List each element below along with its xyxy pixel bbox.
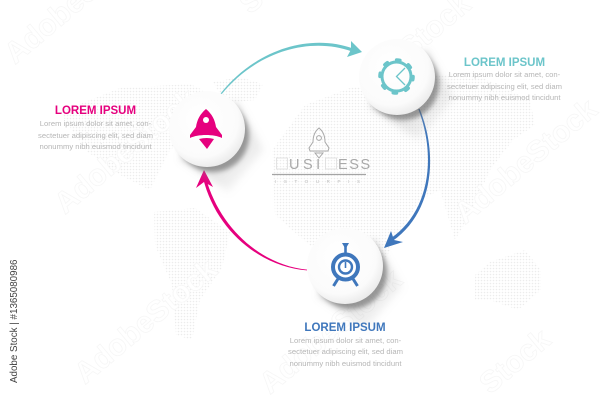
icon: outline rocket [309,128,329,158]
body: bottom: sectetuer adipiscing elit, sed diam [288,347,403,356]
body: bottom [288,336,403,368]
node: rocket [169,91,264,192]
world map [60,72,541,340]
tagline: ISTOURPIS [275,179,368,184]
watermark: AdobeStock [68,252,224,390]
placeholder boxes in wordmark [276,158,336,169]
body: left: sectetuer adipiscing elit, sed diam [38,131,153,140]
heading: left: LOREM IPSUM [55,105,136,117]
icon: target [333,243,358,286]
watermark: AdobeStock [448,92,600,230]
rule [272,174,366,176]
heading: bottom: LOREM IPSUM [304,322,386,334]
watermark: AdobeStock [48,82,204,220]
business wordmark: USI [289,157,324,173]
body: bottom: nonummy nibh euismod tincidunt [290,359,401,368]
body: right: Lorem ipsum dolor sit amet, con- [449,70,560,79]
center logo [272,128,372,184]
node: gear [359,39,454,140]
body: left: nonummy nibh euismod tincidunt [40,142,151,151]
stock id: Adobe Stock | #1365080986 [9,259,20,383]
body: left: Lorem ipsum dolor sit amet, con- [40,119,151,128]
body: right: sectetuer adipiscing elit, sed diam [447,82,562,91]
arrow: pink, from target to rocket [196,170,307,270]
body: right [447,70,562,102]
icon: gear [380,60,413,93]
arrow: teal, from rocket to gear [220,41,362,94]
icon: rocket [190,109,222,149]
body: right: nonummy nibh euismod tincidunt [449,93,560,102]
body: bottom: Lorem ipsum dolor sit amet, con- [290,336,401,344]
watermark: Stock [473,322,557,400]
watermark: AdobeStock [253,262,409,400]
node: target [307,228,402,329]
heading: right: LOREM IPSUM [464,57,545,69]
business wordmark: ESS [338,157,372,173]
body: left [38,119,153,151]
arrow: blue, from gear to target [384,109,430,248]
